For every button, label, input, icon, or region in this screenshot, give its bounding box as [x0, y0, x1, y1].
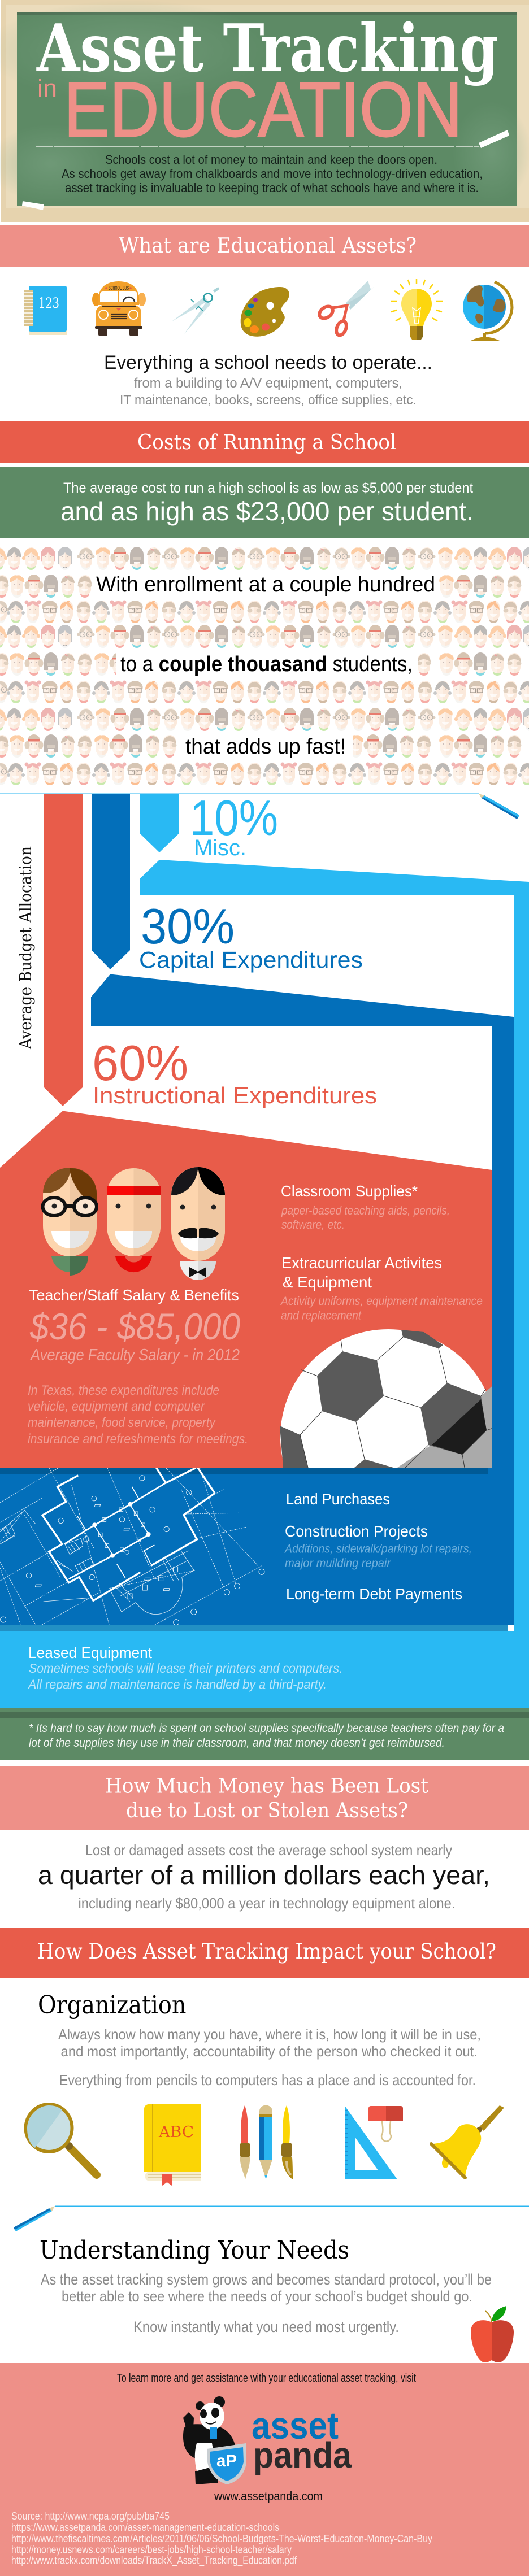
panel: footer: [0, 2363, 529, 2576]
leased equipment text: Sometimes schools will lease their printers and computers.: [29, 1661, 342, 1676]
pencil line bottom: [14, 2205, 529, 2231]
text block: organization: Always know how many you have, where it is, how long it will be in use,: [58, 2026, 481, 2043]
intro text: As schools get away from chalkboards and move into technology-driven education,: [62, 167, 483, 181]
icon: drawing compass: [172, 287, 219, 334]
text block: quarter of a million: [38, 1842, 490, 1912]
text block: quarter of a million: Lost or damaged assets cost the average school system nearly: [85, 1842, 452, 1859]
text block: organization: and most importantly, accountability of the person who checked it out.: [61, 2043, 478, 2060]
capital expenditures list: Construction Projects: [285, 1522, 428, 1540]
classroom supplies text: Classroom Supplies*: [281, 1182, 418, 1200]
green band: cost per student: [0, 467, 529, 538]
classroom supplies text: paper-based teaching aids, pencils,: [281, 1204, 450, 1217]
heading band: Costs of Running a School: [0, 421, 529, 463]
enrollment line 1: With enrollment at a couple hundred: [96, 573, 435, 597]
heading band: What are Educational Assets: What are Educational Assets?: [119, 234, 417, 258]
icon: yellow ABC book: [144, 2104, 201, 2186]
enrollment line 2: to a couple thouasand students,: [120, 652, 413, 676]
stat: 10 percent misc: 10%: [190, 790, 278, 846]
icon: teacher with headband: [107, 1168, 161, 1272]
icon: pens and brushes: [240, 2105, 293, 2179]
title line 2: EDUCATION: [64, 67, 462, 153]
green band: cost per student: and as high as $23,000 per student.: [60, 497, 474, 526]
icon: blue notebook: [24, 286, 67, 335]
chalk stick right: [479, 130, 509, 148]
sources list: http://www.thefiscaltimes.com/Articles/2011/06/06/School-Budgets-The-Worst-Education-Money-Can-Buy: [11, 2533, 432, 2544]
icon: school bus: [92, 281, 146, 336]
heading band: How much money lost: How Much Money has Been Lost: [105, 1775, 428, 1798]
heading band: Costs of Running a School: Costs of Running a School: [137, 431, 396, 454]
classroom supplies text: [281, 1182, 450, 1232]
icon: teacher with mustache: [171, 1167, 225, 1280]
capital expenditures list: [284, 1490, 472, 1603]
logo: panda mascot: [183, 2396, 246, 2484]
text block: organization: Everything from pencils to computers has a place and is accounted for.: [59, 2072, 476, 2088]
text block: everything a school needs: IT maintenance, books, screens, office supplies, etc.: [120, 393, 417, 408]
title word: in: in: [37, 75, 57, 102]
sources list: https://www.assetpanda.com/asset-management-education-schools: [11, 2522, 279, 2533]
text block: everything a school needs: from a building to A/V equipment, computers,: [134, 376, 402, 391]
band: light blue flow: [0, 860, 529, 1708]
text block: everything a school needs: [104, 352, 432, 408]
panel: student faces pattern: [0, 547, 529, 785]
extracurricular text: Extracurricular Activites: [281, 1254, 442, 1272]
logo wordmark: panda: panda: [253, 2435, 352, 2475]
classroom supplies text: software, etc.: [281, 1219, 345, 1232]
pencil line top: [0, 793, 519, 819]
icon: yellow ABC book: ABC: [158, 2124, 194, 2141]
Texas expenditures note: insurance and refreshments for meetings.: [28, 1431, 248, 1447]
intro text: [62, 153, 483, 195]
extracurricular text: Activity uniforms, equipment maintenance: [280, 1295, 483, 1308]
band: dark blue flow: [0, 974, 514, 1625]
green band: footnote: [0, 1708, 529, 1760]
Texas expenditures note: [28, 1383, 248, 1447]
green band: cost per student: The average cost to run a high school is as low as $5,000 per student: [63, 480, 473, 496]
icon: paint palette: [241, 287, 289, 337]
call to action: To learn more and get assistance with your educcational asset tracking, visit: [117, 2372, 416, 2384]
heading band: How does asset tracking impact: [0, 1928, 529, 1978]
teacher salary text: [29, 1286, 240, 1364]
logo: panda mascot: aP: [216, 2452, 237, 2470]
text block: organization: Organization: [38, 1991, 187, 2020]
icon: set square and binder clip: [345, 2106, 403, 2179]
stat: 60 percent instructional expenditures: Instructional Expenditures: [93, 1082, 377, 1108]
stat: 60 percent instructional expenditures: 60%: [92, 1035, 188, 1091]
text block: quarter of a million: a quarter of a million dollars each year,: [38, 1860, 490, 1890]
icon: globe: [463, 282, 512, 341]
chalk stick left: [22, 201, 44, 210]
icon: blue notebook: 123: [38, 295, 59, 311]
heading band: How does asset tracking impact: How Does Asset Tracking Impact your School?: [37, 1939, 496, 1964]
website: www.assetpanda.com: [214, 2489, 323, 2503]
sources list: http://www.trackx.com/downloads/TrackX_Asset_Tracking_Education.pdf: [11, 2555, 297, 2567]
arrow: red 60 percent: [44, 794, 83, 1106]
leased equipment text: All repairs and maintenance is handled by a third-party.: [27, 1677, 327, 1691]
icon: teacher with glasses: [43, 1168, 97, 1276]
teacher salary text: Average Faculty Salary - in 2012: [29, 1346, 240, 1364]
logo wordmark: asset: asset: [252, 2404, 339, 2447]
text block: quarter of a million: including nearly $80,000 a year in technology equipment alone.: [78, 1895, 456, 1912]
band: shadow under red panel: [0, 1468, 488, 1474]
heading band: How much money lost: [0, 1766, 529, 1830]
panel: chalkboard header: [0, 0, 529, 222]
teacher salary text: $36 - $85,000: [29, 1306, 240, 1347]
extracurricular text: [280, 1254, 483, 1322]
text block: understanding your needs: Know instantly what you need most urgently.: [133, 2318, 399, 2335]
sources list: Source: http://www.ncpa.org/pub/ba745: [11, 2510, 170, 2522]
text block: understanding your needs: [40, 2236, 492, 2335]
leased equipment text: Leased Equipment: [28, 1644, 152, 1661]
heading band: How much money lost: due to Lost or Stolen Assets?: [126, 1799, 408, 1822]
arrow: light blue 10 percent: [140, 794, 179, 852]
extracurricular text: & Equipment: [283, 1273, 372, 1291]
stat: 30 percent capital expenditures: [139, 898, 363, 973]
arrow: dark blue 30 percent: [92, 794, 130, 969]
icon: scissors: [317, 281, 374, 337]
teacher salary text: Teacher/Staff Salary & Benefits: [29, 1286, 239, 1304]
icon: light bulb: [391, 279, 443, 340]
intro text: asset tracking is invaluable to keeping track of what schools have and where it is.: [65, 181, 479, 195]
leased equipment text: [27, 1644, 342, 1691]
Texas expenditures note: vehicle, equipment and computer: [28, 1399, 205, 1415]
sources list: [11, 2510, 432, 2567]
illustration: building blueprint: [0, 1468, 264, 1625]
label: average budget allocation: Average Budget Allocation: [16, 846, 35, 1050]
capital expenditures list: Additions, sidewalk/parking lot repairs,: [284, 1542, 472, 1556]
Texas expenditures note: In Texas, these expenditures include: [28, 1383, 219, 1398]
band: shadow under dark blue panel: [0, 1625, 508, 1631]
text block: organization: [38, 1991, 481, 2088]
Texas expenditures note: maintenance, food service, property: [28, 1415, 216, 1430]
icon: magnifying glass: [26, 2104, 97, 2175]
stat: 10 percent misc: Misc.: [194, 836, 246, 860]
capital expenditures list: major muilding repair: [285, 1557, 391, 1570]
stat: 30 percent capital expenditures: 30%: [141, 898, 235, 954]
icon: school bus: SCHOOL BUS: [109, 285, 129, 291]
text block: understanding your needs: better able to see where the needs of your school’s budget should go.: [62, 2288, 472, 2305]
green band: footnote: lot of the supplies they use in their classroom, and that money doesn’t get reimbursed.: [29, 1737, 445, 1750]
text block: understanding your needs: Understanding Your Needs: [40, 2236, 349, 2265]
stat: 30 percent capital expenditures: Capital Expenditures: [139, 947, 363, 973]
icon: soccer ball: [280, 1329, 492, 1468]
icon: school bell: [431, 2105, 504, 2178]
extracurricular text: and replacement: [281, 1309, 362, 1322]
icon: red apple: [471, 2306, 514, 2362]
sources list: http://money.usnews.com/careers/best-jobs/high-school-teacher/salary: [11, 2544, 292, 2556]
stat: 60 percent instructional expenditures: [92, 1035, 377, 1108]
intro text: Schools cost a lot of money to maintain and keep the doors open.: [105, 153, 437, 167]
panel: instructional expenditures detail: [0, 1111, 492, 1468]
capital expenditures list: Long-term Debt Payments: [286, 1585, 462, 1603]
enrollment line 3: that adds up fast!: [185, 735, 346, 759]
capital expenditures list: Land Purchases: [286, 1490, 390, 1508]
text block: everything a school needs: Everything a school needs to operate...: [104, 352, 432, 373]
heading band: What are Educational Assets: [0, 225, 529, 267]
